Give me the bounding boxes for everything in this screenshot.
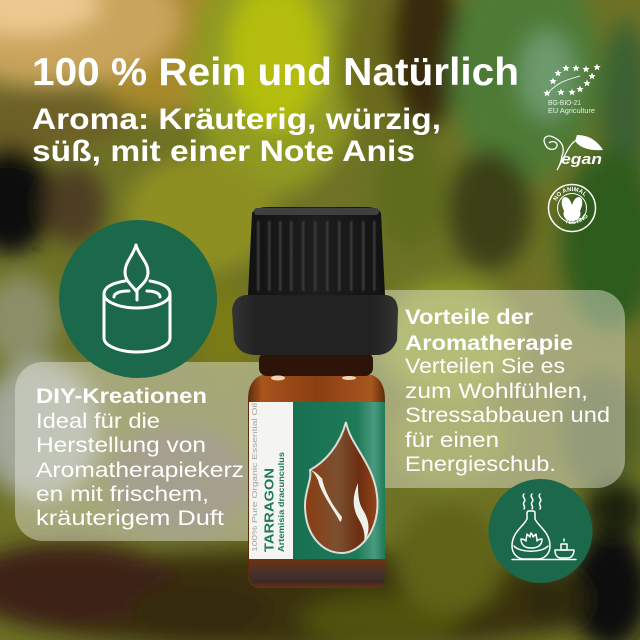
label: product text: TARRAGON <box>262 468 276 552</box>
bottle collar <box>232 295 398 355</box>
bottle <box>232 207 398 588</box>
title: 100 % Rein und Natürlich <box>32 51 519 94</box>
bottle base shading <box>249 559 385 588</box>
icon: vegan badge: egan <box>561 151 602 168</box>
icon: no animal testing badge: NO ANIMAL <box>552 186 586 201</box>
text block: Vorteile der Aromatherapie <box>405 305 610 476</box>
icon: candle in green circle <box>59 220 217 378</box>
icon: diffuser in green circle <box>488 479 592 583</box>
text block: DIY-Kreationen: Aromatherapiekerz <box>36 458 244 482</box>
panel: Aromatherapie background <box>330 290 625 488</box>
label: drop <box>305 422 377 553</box>
text block: Vorteile der Aromatherapie: Aromatherapie <box>405 331 573 355</box>
label: green panel <box>293 402 385 559</box>
label: product text: 100% Pure Organic Essential Oil <box>250 403 259 552</box>
bottle body <box>248 375 385 588</box>
text block: Vorteile der Aromatherapie: Verteilen Sie es <box>405 354 565 378</box>
text block: DIY-Kreationen: Ideal für die <box>36 409 160 433</box>
text block: Vorteile der Aromatherapie: Energieschub. <box>405 452 556 476</box>
text block: DIY-Kreationen: kräuterigem Duft <box>36 506 224 530</box>
bottle neck <box>259 352 373 376</box>
label: product text <box>250 403 286 552</box>
text block: DIY-Kreationen <box>36 384 244 530</box>
icon: vegan badge <box>544 135 603 170</box>
text block: Vorteile der Aromatherapie: Stressabbauen und <box>405 403 610 427</box>
label: product text: Artemisia dracunculus <box>276 452 286 552</box>
heading: aroma: süß, mit einer Note Anis <box>32 135 415 168</box>
text block: Vorteile der Aromatherapie: für einen <box>405 428 499 452</box>
icon: no animal testing badge: TESTING <box>566 214 588 224</box>
heading: aroma: Aroma: Kräuterig, würzig, <box>32 103 441 136</box>
icon: EU organic leaf: BG-BIO-21 <box>548 98 581 107</box>
label: white strip <box>249 402 293 559</box>
text block: DIY-Kreationen: en mit frischem, <box>36 482 209 506</box>
icon: EU organic leaf <box>543 64 601 115</box>
text block: Vorteile der Aromatherapie: Vorteile der <box>405 305 534 329</box>
bottle cap <box>248 207 385 295</box>
icon: EU organic leaf: EU Agriculture <box>548 106 595 115</box>
icon: no animal testing badge <box>548 184 596 232</box>
text block: DIY-Kreationen: Herstellung von <box>36 433 206 457</box>
text block: DIY-Kreationen: DIY-Kreationen <box>36 384 207 408</box>
panel: DIY-Kreationen background <box>15 362 315 541</box>
heading: aroma <box>32 103 441 168</box>
glass highlights <box>271 376 356 380</box>
text block: Vorteile der Aromatherapie: zum Wohlfühlen, <box>405 379 588 403</box>
